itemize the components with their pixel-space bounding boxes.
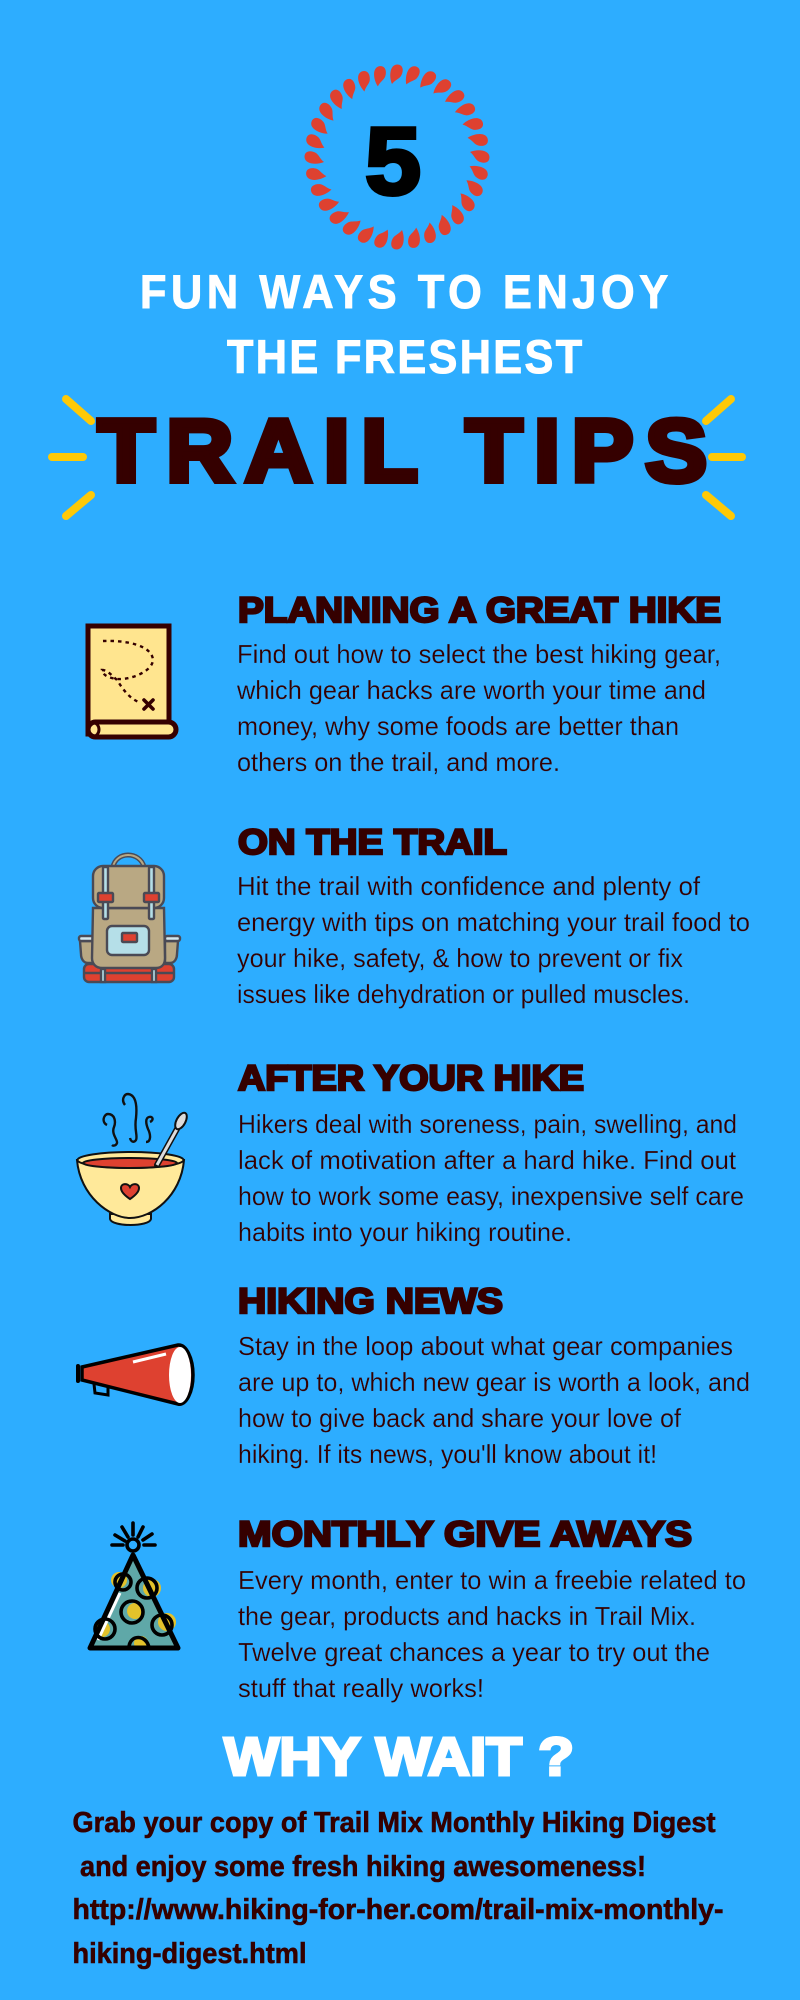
body text: how to give back and share your love of xyxy=(238,1403,682,1433)
body text: Find out how to select the best hiking gear, xyxy=(237,639,721,669)
panel: hiking news xyxy=(78,1282,750,1469)
icon: megaphone xyxy=(78,1345,193,1404)
body text: Hikers deal with soreness, pain, swelling, and xyxy=(238,1109,737,1139)
body text: habits into your hiking routine. xyxy=(238,1217,572,1247)
title line 1: FUN WAYS TO ENJOY xyxy=(140,265,668,318)
panel: planning a great hike xyxy=(88,591,721,777)
panel: monthly give aways xyxy=(90,1515,746,1703)
heading: why wait: WHY WAIT ? xyxy=(224,1727,574,1787)
heading: trail tips: TRAIL TIPS xyxy=(98,402,707,501)
body text: Every month, enter to win a freebie related to xyxy=(238,1565,746,1595)
body text xyxy=(236,639,721,777)
heading: MONTHLY GIVE AWAYS xyxy=(238,1515,692,1554)
call to action text: http://www.hiking-for-her.com/trail-mix-monthly- xyxy=(72,1894,724,1926)
title line 2: THE FRESHEST xyxy=(227,330,583,383)
icon: treasure map xyxy=(88,626,176,737)
main title with sparks xyxy=(52,399,742,516)
body text: are up to, which new gear is worth a look, and xyxy=(238,1367,750,1397)
call to action text: hiking-digest.html xyxy=(72,1938,306,1970)
icon: backpack xyxy=(79,855,180,982)
call to action text: and enjoy some fresh hiking awesomeness! xyxy=(80,1851,646,1883)
icon: yellow sparks xyxy=(52,399,742,516)
panel: on the trail xyxy=(79,823,750,1009)
heading: HIKING NEWS xyxy=(238,1282,503,1321)
body text: which gear hacks are worth your time and xyxy=(236,675,706,705)
body text: hiking. If its news, you'll know about it! xyxy=(238,1439,657,1469)
heading: ON THE TRAIL xyxy=(238,823,507,862)
body text: Hit the trail with confidence and plenty of xyxy=(237,871,701,901)
icon: ring of red drops xyxy=(304,64,490,250)
icon: soup bowl xyxy=(77,1094,189,1225)
body text xyxy=(238,1331,750,1469)
body text: lack of motivation after a hard hike. Find out xyxy=(238,1145,737,1175)
number 5: 5 xyxy=(365,108,421,215)
body text: Twelve great chances a year to try out the xyxy=(238,1637,710,1667)
body text xyxy=(237,871,750,1009)
body text: how to work some easy, inexpensive self care xyxy=(238,1181,744,1211)
body text xyxy=(238,1109,744,1247)
body text: the gear, products and hacks in Trail Mix. xyxy=(238,1601,696,1631)
panel: after your hike xyxy=(77,1059,744,1247)
body text: your hike, safety, & how to prevent or fix xyxy=(237,943,683,973)
call to action text: Grab your copy of Trail Mix Monthly Hiking Digest xyxy=(72,1807,716,1839)
body text: Stay in the loop about what gear companies xyxy=(238,1331,733,1361)
body text: stuff that really works! xyxy=(238,1673,484,1703)
call to action text xyxy=(72,1807,724,1970)
body text: energy with tips on matching your trail food to xyxy=(237,907,750,937)
body text xyxy=(238,1565,746,1703)
icon: party hat xyxy=(90,1523,178,1650)
body text: others on the trail, and more. xyxy=(237,747,560,777)
body text: money, why some foods are better than xyxy=(237,711,679,741)
body text: issues like dehydration or pulled muscles. xyxy=(237,979,690,1009)
heading: AFTER YOUR HIKE xyxy=(238,1059,584,1098)
heading: PLANNING A GREAT HIKE xyxy=(238,591,721,630)
